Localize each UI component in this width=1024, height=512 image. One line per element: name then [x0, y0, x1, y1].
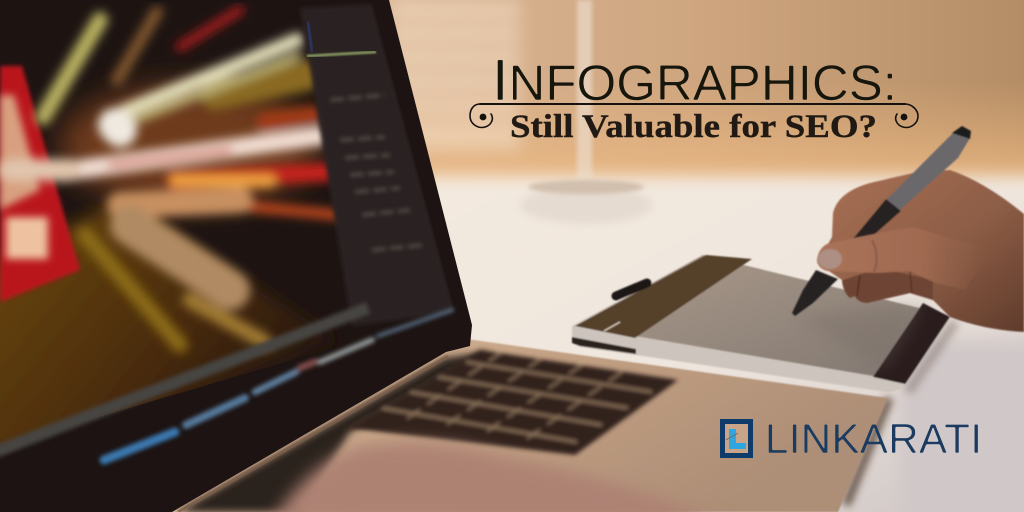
- histogram: [307, 22, 376, 56]
- panel settings rows: [330, 95, 425, 250]
- thumb nail: [818, 249, 842, 269]
- blurred dock icons: [104, 310, 452, 460]
- laptop base: [170, 336, 888, 512]
- dark base zone near hinge: [178, 352, 490, 512]
- window blinds glow: [390, 0, 520, 150]
- motion streaks: [10, 10, 340, 345]
- hinge edge: [178, 356, 448, 512]
- base edge shadow: [846, 398, 889, 505]
- blurred typing hand: [272, 443, 725, 512]
- blurred lamp: [520, 0, 652, 224]
- editing side panel: [300, 4, 455, 326]
- laptop screen image: [0, 0, 460, 460]
- photo background: warm wall: [0, 0, 1024, 195]
- stylus pen: [792, 126, 971, 316]
- lower fingers: [842, 268, 933, 303]
- glow behind streaks: [60, 85, 320, 205]
- laptop lid: [0, 0, 472, 512]
- logo wordmark: LINKARATI: [765, 415, 982, 462]
- hand holding pen: [792, 126, 1024, 332]
- Linkarati logo: [722, 415, 982, 462]
- tablet shading from hand: [795, 305, 925, 370]
- decorative scroll rule: [470, 104, 918, 127]
- title: [470, 48, 918, 145]
- screen top edge: [0, 0, 372, 3]
- heading: Infographics: INFOGRAPHICS:: [492, 48, 897, 113]
- desk surface: [370, 176, 1024, 512]
- subheading: Still Valuable for SEO?: [510, 109, 877, 145]
- thumb: [817, 227, 990, 290]
- tablet shadow: [908, 322, 955, 392]
- logo mark: [722, 422, 750, 456]
- red block: [0, 66, 80, 302]
- graphics tablet: [572, 255, 950, 392]
- blurred keyboard: [348, 350, 678, 455]
- screen lower gray band: [0, 308, 368, 452]
